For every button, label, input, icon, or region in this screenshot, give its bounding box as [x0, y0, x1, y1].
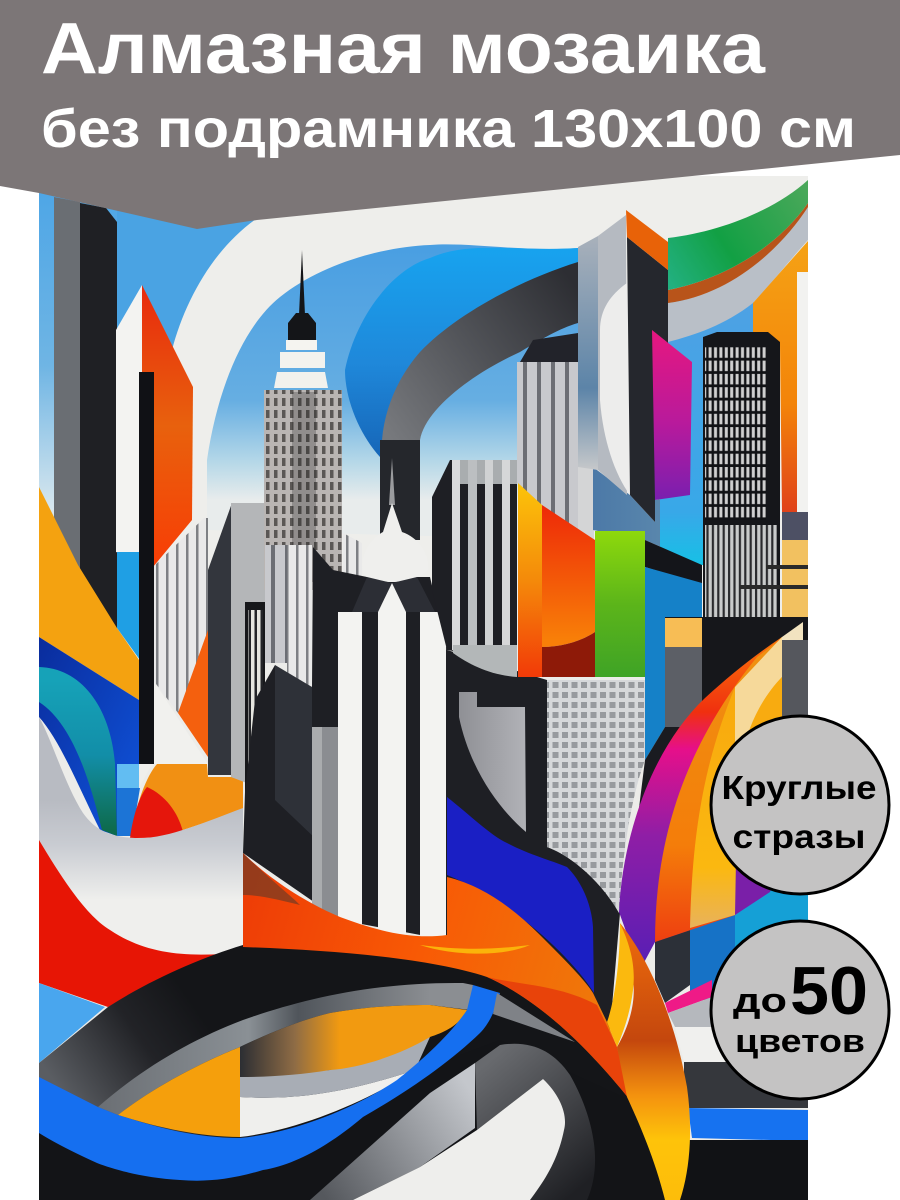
- striped block right: [343, 533, 362, 582]
- tier low: [274, 372, 328, 388]
- blue lower middle: [690, 915, 735, 1000]
- grey building face: [231, 503, 265, 790]
- orange-yellow slab: [518, 483, 542, 677]
- inner orange: [738, 677, 782, 860]
- white arch: [353, 1079, 565, 1200]
- orange edge: [668, 203, 808, 303]
- silver wedge bottom: [310, 1063, 475, 1200]
- yellow streak: [420, 945, 530, 954]
- yellow sliver: [607, 923, 634, 1047]
- dark red slab: [542, 632, 595, 677]
- left sky strip: [39, 193, 117, 516]
- shaft: [264, 390, 342, 590]
- black swoosh: [39, 945, 680, 1200]
- grey block: [665, 647, 702, 727]
- banner shape: [0, 0, 900, 229]
- bright blue swirl: [345, 248, 578, 457]
- badge text line 1: Круглые: [722, 769, 876, 806]
- tall stripes: [705, 525, 777, 617]
- white tower face: [116, 285, 142, 560]
- badge number: 50: [790, 953, 868, 1029]
- bottom black: [39, 1040, 680, 1200]
- blue band: [39, 985, 500, 1181]
- dark roof: [520, 333, 578, 362]
- dome: [362, 503, 428, 582]
- dark windowed building: [703, 332, 780, 620]
- grey band: [98, 983, 473, 1115]
- purple corner: [735, 840, 790, 915]
- grey cut shape: [459, 692, 526, 832]
- grey column: [312, 727, 338, 917]
- dark lower left: [655, 925, 690, 1003]
- orange band: [655, 638, 782, 942]
- silver face light: [598, 215, 627, 495]
- green slab: [595, 531, 645, 677]
- badge circle: [711, 716, 889, 894]
- right blade: [617, 923, 690, 1200]
- white column middle: [378, 583, 406, 950]
- striped block left: [265, 545, 312, 663]
- white curved face: [600, 283, 630, 495]
- badge word do: до: [733, 982, 787, 1020]
- deep blue wave: [447, 797, 594, 993]
- central black mass: [243, 547, 620, 1030]
- orange left wedge: [118, 1047, 240, 1137]
- grey stripe: [668, 997, 712, 1027]
- stripes top: [452, 460, 517, 484]
- orange triangle: [178, 630, 208, 757]
- dark grey tube: [475, 1044, 595, 1200]
- deep blue curve: [39, 637, 139, 836]
- black strip: [139, 372, 154, 764]
- blue strip under tower: [117, 552, 140, 660]
- grey wedge: [240, 1037, 430, 1098]
- right colour block grey: [782, 512, 808, 540]
- grey right: [782, 640, 808, 730]
- blue slab: [645, 567, 702, 760]
- tier mid: [280, 352, 325, 368]
- light blue corner: [39, 983, 105, 1063]
- white stripe: [675, 1027, 808, 1062]
- dark fill behind fan: [630, 727, 715, 880]
- white column right: [420, 612, 446, 947]
- dark band: [645, 540, 702, 585]
- badge circle: [711, 921, 889, 1099]
- orange top: [626, 210, 668, 270]
- centre dark building: [432, 460, 517, 660]
- fire wave: [243, 853, 630, 1100]
- pink stripe: [665, 980, 712, 1013]
- grid building: [547, 680, 645, 913]
- silver skyscraper left face: [578, 236, 598, 470]
- blue block: [117, 788, 140, 836]
- cream square: [782, 622, 803, 640]
- painting: abstract city skyline: [39, 176, 808, 1200]
- tier top: [286, 340, 317, 350]
- badge word colours: цветов: [735, 1023, 865, 1059]
- yellow band: [690, 637, 782, 928]
- badge: round rhinestones: [711, 716, 889, 894]
- cyan curve: [39, 667, 117, 836]
- dark fire shade: [243, 853, 300, 905]
- crown black: [288, 313, 316, 340]
- tower spire inside: [389, 458, 395, 505]
- Empire State tower: [264, 250, 342, 590]
- blue stripe: [688, 1108, 808, 1141]
- left dark column: [80, 203, 117, 640]
- white wave: [39, 717, 243, 884]
- title line 2: без подрамника 130х100 см: [41, 99, 856, 159]
- red shape: [130, 787, 183, 838]
- spire: [299, 250, 305, 315]
- magenta panel: [652, 330, 692, 500]
- orange block: [138, 764, 243, 830]
- yellow wedge left: [39, 487, 139, 700]
- striped narrow tower: [245, 602, 265, 792]
- right colour block yellow: [782, 540, 808, 617]
- dark bands: [766, 565, 808, 569]
- yellow square: [665, 618, 702, 647]
- red-orange slab: [542, 505, 595, 647]
- white gap: [139, 764, 152, 786]
- orange column right: [753, 241, 808, 512]
- rainbow fan: [619, 637, 790, 970]
- purple magenta band: [619, 637, 782, 970]
- shaft centre: [292, 392, 316, 582]
- fire lower red: [487, 977, 630, 1100]
- grey ribbon: [668, 205, 808, 342]
- header banner: [0, 0, 900, 229]
- green ribbon: [668, 180, 808, 290]
- painting base white: [40, 544, 808, 1140]
- body: [703, 332, 780, 620]
- left grey column: [54, 197, 80, 570]
- dark face: [627, 237, 668, 522]
- white column left: [338, 612, 362, 932]
- cream band: [735, 637, 782, 790]
- orange ellipse: [240, 1005, 467, 1077]
- orange tower: [142, 285, 193, 567]
- badge text line 2: стразы: [732, 818, 866, 855]
- cyan lower right: [735, 880, 808, 990]
- light block: [578, 467, 594, 542]
- steel blue slab: [593, 467, 702, 565]
- dark building left face: [208, 503, 232, 775]
- white stripes: [452, 460, 460, 650]
- grey upper wedge: [493, 993, 575, 1042]
- dark left-centre panel: [275, 665, 338, 860]
- striped building: [517, 362, 578, 540]
- blue right: [700, 725, 808, 900]
- dark stripe: [684, 1062, 808, 1108]
- dome crown right: [392, 577, 435, 612]
- grey base of building: [453, 645, 517, 677]
- white panel right: [797, 272, 808, 512]
- dark tower under band: [380, 440, 420, 540]
- white wedge: [240, 1070, 415, 1137]
- blue sky behind arc: [117, 210, 254, 347]
- black base right: [680, 1140, 808, 1200]
- red wave: [39, 840, 216, 1007]
- inner sky: [207, 244, 578, 498]
- badge: up to 50 colours: [711, 921, 889, 1099]
- white arc: [172, 219, 267, 390]
- grey curved band: [382, 262, 578, 440]
- light blue block: [117, 764, 139, 788]
- title line 1: Алмазная мозаика: [41, 9, 766, 89]
- white triangle: [153, 680, 208, 764]
- striped white building: [153, 518, 208, 713]
- dark block right: [665, 617, 808, 727]
- sky right: [660, 300, 754, 565]
- dome crown left: [352, 577, 392, 612]
- windows: [705, 347, 766, 520]
